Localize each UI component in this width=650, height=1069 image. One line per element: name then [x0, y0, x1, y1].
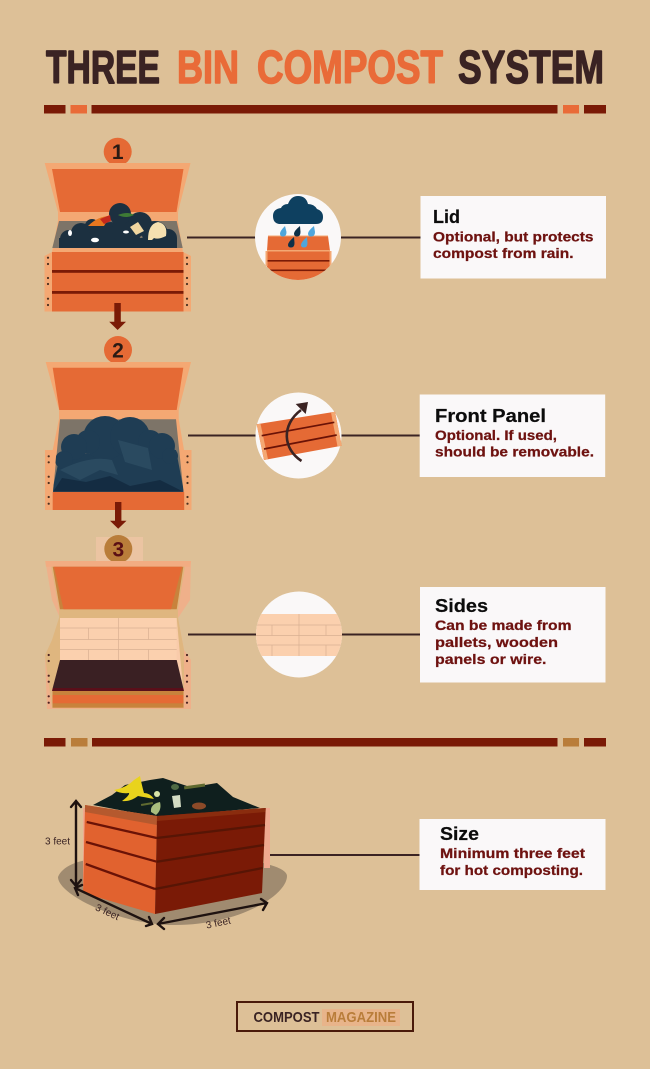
dimension labels: 3 feet [205, 916, 232, 932]
number badge 3: 3 [112, 538, 124, 562]
dimension arrows [71, 801, 267, 929]
icon: rain cloud [273, 196, 323, 224]
logo [237, 1002, 413, 1031]
panel: sides [420, 587, 606, 682]
number badge 2: 2 [112, 340, 124, 362]
bin 1 illustration [44, 138, 191, 312]
text: sides description: panels or wire. [435, 652, 546, 667]
text: sides description: pallets, wooden [435, 635, 558, 650]
panel: size [420, 819, 606, 890]
heading: front panel: Front Panel [435, 406, 546, 426]
logo: MAGAZINE [326, 1009, 396, 1026]
icon: front panel being lifted [256, 392, 342, 478]
text: lid description [433, 230, 594, 261]
heading: size: Size [440, 824, 479, 844]
title: SYSTEM [458, 41, 604, 93]
text: front panel description: should be removable. [435, 445, 594, 460]
title [46, 41, 604, 93]
shadow [58, 860, 287, 925]
compost pile [59, 203, 177, 248]
number badge 3 [104, 535, 132, 563]
heading: sides: Sides [435, 596, 488, 616]
connector lines [187, 236, 421, 856]
right face [155, 808, 266, 914]
text: front panel description [435, 428, 594, 460]
brick wall [60, 618, 183, 688]
panel: lid [420, 196, 606, 278]
text: sides description: Can be made from [435, 618, 572, 633]
bin 2 illustration [45, 336, 192, 510]
bin 3 illustration [45, 535, 191, 709]
title: COMPOST [257, 41, 443, 93]
dimension labels [45, 836, 232, 932]
text: size description: for hot composting. [440, 863, 583, 878]
icon: lid with rain [255, 194, 341, 281]
text: size description: Minimum three feet [440, 846, 586, 861]
left face [83, 805, 157, 914]
icon: side panel bricks [255, 592, 343, 678]
arrow 1 to 2 [109, 303, 126, 330]
number badge 2 [104, 336, 132, 364]
title: BIN [177, 41, 239, 93]
logo: COMPOST [254, 1009, 320, 1026]
number badge 1: 1 [112, 141, 124, 164]
panel: front panel [420, 394, 605, 477]
size bin illustration [45, 776, 287, 932]
text: lid description: Optional, but protects [433, 230, 594, 244]
text: sides description [435, 618, 572, 667]
text: front panel description: Optional. If used, [435, 428, 557, 443]
arrow 2 to 3 [110, 502, 126, 529]
text: lid description: compost from rain. [433, 246, 574, 261]
number badge 1 [104, 138, 132, 166]
title: THREE [46, 41, 160, 93]
compost mound [93, 778, 260, 817]
food scraps [114, 776, 206, 815]
compost pile [52, 416, 184, 492]
dimension labels: 3 feet [45, 836, 70, 848]
dimension labels: 3 feet [93, 902, 121, 923]
text: size description [440, 846, 586, 878]
heading: lid: Lid [433, 207, 460, 227]
